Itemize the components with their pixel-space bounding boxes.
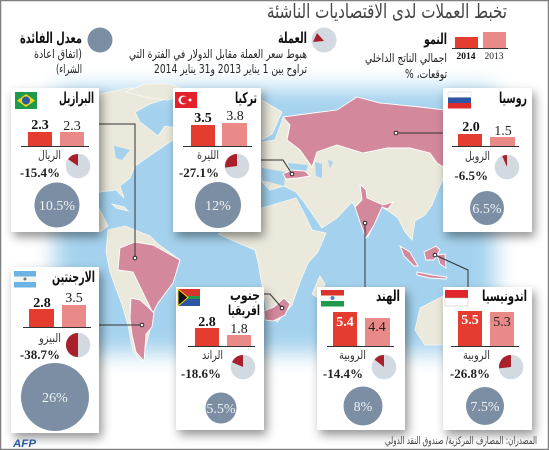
panel: Russia: 1.5 — [494, 124, 512, 139]
highlighted country: South Africa — [264, 298, 290, 321]
panel: Russia: 6.5% — [472, 202, 502, 217]
highlighted country: India — [355, 184, 393, 238]
land: Caribbean islands — [112, 204, 128, 211]
panel: Turkey: 3.5 — [194, 111, 212, 126]
panel: Indonesia: 7.5% — [470, 400, 500, 415]
land: Eurasia — [262, 98, 445, 240]
panel: Argentina: الارجنتين — [52, 268, 95, 286]
flag: Argentina — [14, 271, 36, 288]
panel: Russia: روسيا — [499, 89, 527, 107]
panel: Russia: 2.0 — [462, 120, 480, 135]
flag: South Africa — [178, 289, 200, 306]
legend: growth: 2013 — [484, 52, 504, 62]
legend: interest rate: معدل الفائدة — [20, 29, 82, 47]
legend: growth — [365, 30, 508, 82]
panel: Brazil: 2.3 — [63, 119, 81, 134]
logo: AFP: AFP — [12, 438, 37, 450]
panel: Indonesia: الروبية — [463, 348, 490, 363]
panel: Brazil: الريال — [38, 148, 61, 163]
panel: Brazil: 2.3 — [31, 118, 49, 133]
panel: South Africa: جنوب — [230, 288, 260, 304]
panel: Russia — [443, 88, 532, 232]
flag: India — [321, 290, 344, 306]
panel: South Africa: 5.5% — [206, 402, 236, 417]
panel: Argentina: -38.7% — [20, 347, 60, 362]
flag: Indonesia — [445, 290, 468, 306]
land: Madagascar and Australia — [312, 276, 446, 345]
highlighted country: Russia — [283, 97, 445, 168]
panel: Indonesia: اندونيسيا — [482, 287, 527, 305]
land: Greenland and arctic islands — [125, 84, 282, 140]
panel: Russia: الروبل — [465, 149, 490, 164]
panel: India: الروبية — [339, 348, 366, 363]
panel: Indonesia: 5.3 — [493, 315, 511, 330]
panel: South Africa: 1.8 — [230, 322, 248, 337]
legend: currency: هبوط سعر العملة مقابل الدولار في الفترة التي — [129, 47, 307, 62]
flag: Brazil — [15, 92, 37, 109]
legend: currency: العملة — [278, 29, 307, 47]
panel: Indonesia: 5.5 — [461, 313, 479, 328]
panel: Brazil — [11, 88, 99, 232]
panel: Turkey: 3.8 — [226, 109, 244, 124]
world map — [20, 84, 495, 362]
panel: India: 5.4 — [336, 315, 354, 330]
highlighted country: Argentina — [130, 298, 154, 361]
panel: Argentina: البيزو — [38, 331, 61, 346]
panel: South Africa — [176, 287, 264, 430]
highlighted country: Brazil — [118, 242, 180, 313]
legend: interest rate: الشراء) — [56, 62, 82, 77]
highlighted country: Turkey — [283, 170, 310, 179]
panel: Argentina: 3.5 — [65, 291, 83, 306]
panel: Argentina — [11, 267, 99, 433]
panel: Brazil: البرازيل — [59, 89, 94, 107]
connector lines — [99, 124, 468, 327]
panel: Turkey: -27.1% — [179, 165, 219, 180]
legend: growth: توقعات، % — [405, 67, 447, 82]
panel: Turkey: 12% — [205, 199, 231, 214]
panel: Turkey — [173, 88, 261, 232]
panel: Argentina: 26% — [42, 391, 68, 406]
panel: India — [317, 287, 405, 430]
land: South America — [106, 226, 180, 362]
panel: Brazil: 10.5% — [39, 199, 75, 214]
highlighted country: Indonesia — [400, 246, 447, 279]
water: lakes and inland seas — [114, 146, 333, 186]
legend: currency: تراوح بين 1 يناير 2013 و31 يناير 2014 — [154, 62, 307, 77]
panel: Turkey: تركيا — [235, 89, 257, 107]
panel: Indonesia — [443, 287, 532, 430]
legend: currency — [129, 28, 336, 77]
panel: Brazil: -15.4% — [20, 165, 60, 180]
legend: growth: النمو — [423, 30, 447, 48]
panel: India: -14.4% — [323, 366, 363, 381]
legend: growth: 2014 — [456, 52, 476, 62]
panel: South Africa: الراند — [202, 348, 223, 363]
panel: Turkey: الليرة — [197, 148, 219, 163]
land: North America — [20, 88, 178, 232]
panel: South Africa: -18.6% — [181, 366, 221, 381]
flag: Turkey — [175, 92, 197, 108]
panel: India: الهند — [376, 287, 400, 305]
legend: interest rate — [20, 28, 112, 77]
panel: Argentina: 2.8 — [33, 296, 51, 311]
panel: Indonesia: -26.8% — [450, 366, 490, 381]
panel: India: 4.4 — [368, 320, 386, 335]
legend: interest rate: (اتفاق اعادة — [34, 47, 82, 61]
panel: South Africa: افريقيا — [228, 303, 260, 319]
panel: Russia: -6.5% — [454, 168, 488, 183]
flag: Russia — [448, 92, 471, 108]
land: Africa — [218, 198, 326, 322]
panel: India: 8% — [354, 400, 373, 415]
panel: South Africa: 2.8 — [198, 315, 216, 330]
legend: growth: اجمالي الناتج الداخلي — [365, 51, 447, 65]
